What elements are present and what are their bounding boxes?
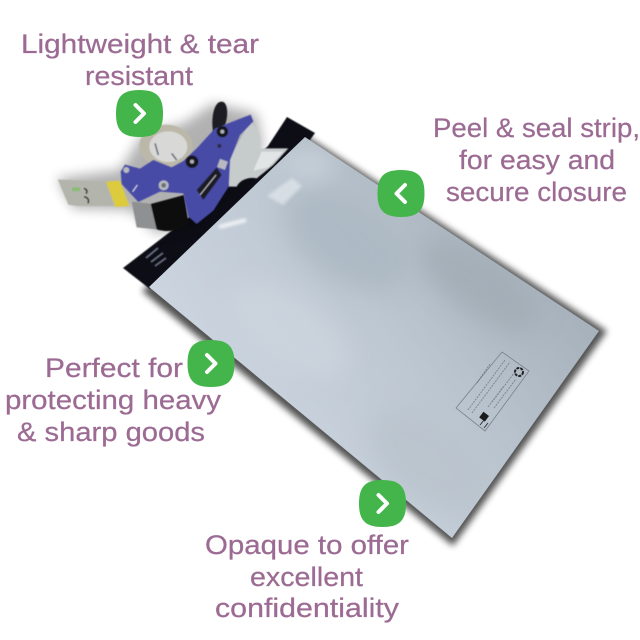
callout: opaque for confidentiality — [205, 530, 409, 623]
black peel and seal strip — [123, 117, 315, 289]
dispenser shadow — [57, 103, 263, 233]
callout: opaque for confidentiality: confidentiality — [215, 593, 400, 623]
callout: lightweight and tear resistant: resistant — [85, 61, 194, 91]
callout: perfect for protecting heavy and sharp goods — [5, 353, 222, 447]
callout: opaque for confidentiality: excellent — [250, 562, 364, 592]
callout: peel and seal strip: Peel & seal strip, — [433, 113, 640, 143]
callout: peel and seal strip: for easy and — [459, 145, 615, 175]
callout: lightweight and tear resistant: Lightweight & tear — [21, 29, 259, 59]
callout: lightweight and tear resistant — [21, 29, 259, 91]
icon: recycling — [515, 368, 523, 376]
tape dispenser — [57, 102, 288, 233]
tape roll — [139, 125, 193, 167]
blue frame — [121, 115, 253, 224]
icon: green chevron right badge — [188, 340, 234, 387]
backing label — [58, 179, 129, 207]
bag shadow — [142, 135, 607, 546]
callout: perfect for protecting heavy and sharp goods: Perfect for — [45, 353, 183, 383]
roller — [132, 195, 188, 231]
icon: green chevron left badge — [378, 170, 424, 217]
icon: green chevron right badge — [359, 480, 406, 527]
callout: peel and seal strip — [433, 113, 640, 207]
printed compliance label — [456, 352, 529, 431]
callout: perfect for protecting heavy and sharp goods: protecting heavy — [5, 385, 222, 415]
handle — [212, 102, 288, 187]
mailing bag with tape dispenser — [57, 102, 607, 546]
bag body — [149, 137, 599, 538]
icon: green chevron right badge — [116, 90, 163, 137]
callout: peel and seal strip: secure closure — [446, 177, 627, 207]
callout: opaque for confidentiality: Opaque to offer — [205, 530, 409, 560]
callout: perfect for protecting heavy and sharp goods: & sharp goods — [17, 417, 205, 447]
